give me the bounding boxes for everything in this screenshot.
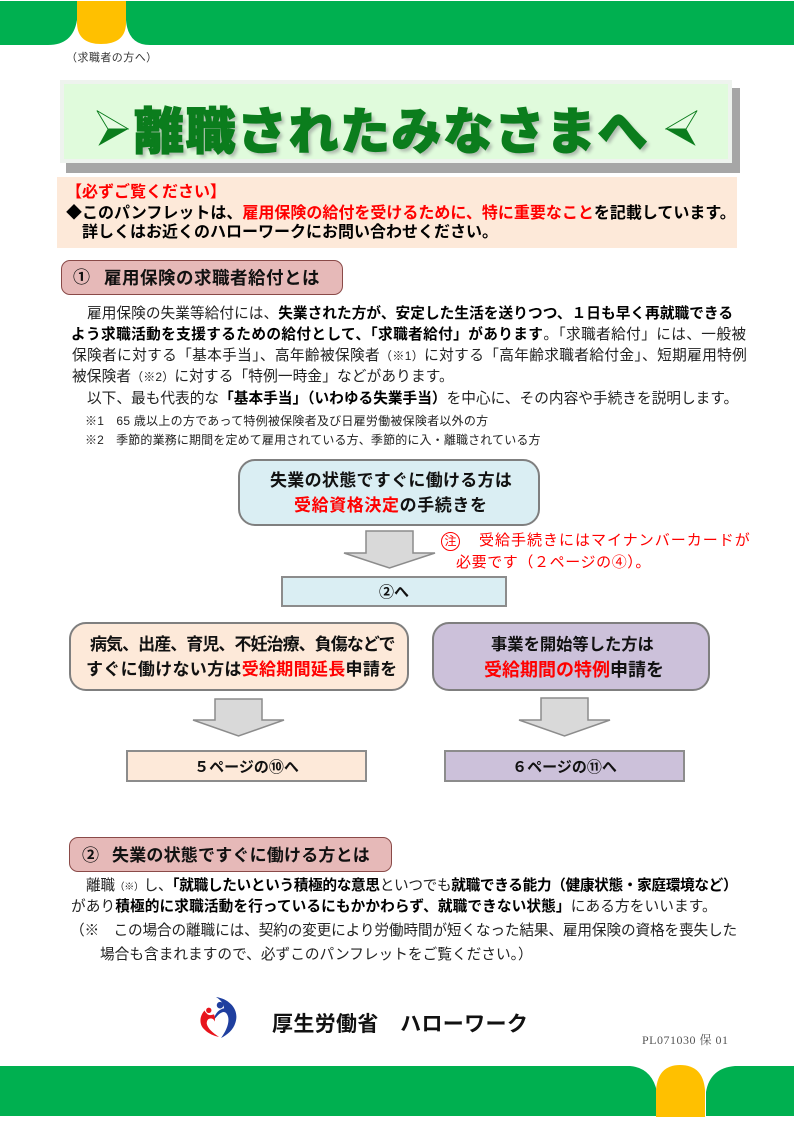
document code: PL071030 保 01: [642, 1033, 729, 1047]
box text line 2: 受給期間の特例申請を: [484, 660, 664, 680]
line 5: 以下、最も代表的な「基本手当」（いわゆる失業手当）を中心に、その内容や手続きを説明します。: [87, 391, 738, 407]
section 2 heading: 失業の状態ですぐに働ける方とは: [112, 846, 370, 865]
line 1: 離職（※）し、「就職したいという積極的な意思といつでも就職できる能力（健康状態・家庭環境など）: [86, 878, 737, 894]
notice heading: 【必ずご覧ください】: [66, 184, 226, 201]
right arrowhead: [665, 110, 698, 146]
box: can work immediately: [238, 459, 540, 526]
box text line 1: 事業を開始等した方は: [491, 636, 654, 654]
line 2: があり積極的に求職活動を行っているにもかかわらず、就職できない状態」にある方をいいます。: [71, 899, 717, 915]
box: to section 2: ②へ: [379, 584, 409, 601]
note mark: [441, 532, 460, 551]
box text line 2: すぐに働けない方は受給期間延長申請を: [86, 660, 397, 679]
arrow 3: [518, 697, 610, 737]
line 4: 場合も含まれますので、必ずこのパンフレットをご覧ください。）: [100, 947, 533, 963]
box text line 2: 受給資格決定の手続きを: [294, 496, 488, 515]
box: to section 2: [281, 576, 507, 607]
section 1 heading: [61, 260, 343, 295]
section 2 body: [70, 877, 737, 963]
banner shadow: [66, 88, 740, 173]
bottom green band with yellow tab: [0, 1065, 794, 1117]
top green band with yellow tab: [0, 1, 794, 45]
line 2: よう求職活動を支援するための給付として、「求職者給付」があります。「求職者給付」には、一般被: [71, 327, 746, 343]
banner panel: [60, 80, 732, 163]
box: to page 6: [444, 750, 685, 782]
box: cannot work immediately: [69, 622, 409, 691]
box text line 1: 病気、出産、育児、不妊治療、負傷などで: [90, 635, 395, 654]
audience label: （求職者の方へ）: [66, 52, 158, 64]
notice line 1: ◆このパンフレットは、雇用保険の給付を受けるために、特に重要なことを記載しています。: [66, 205, 736, 222]
box text line 1: 失業の状態ですぐに働ける方は: [270, 471, 512, 490]
note line 2: 必要です（２ページの④）。: [456, 554, 651, 571]
title text: 離職されたみなさまへ: [134, 104, 649, 160]
note mark: 注: [444, 534, 456, 548]
line 3: 保険者に対する「基本手当」、高年齢被保険者（※1）に対する「高年齢求職者給付金」、短期雇用特例: [72, 348, 747, 364]
notice line 2: 詳しくはお近くのハローワークにお問い合わせください。: [82, 224, 498, 241]
section 2 heading: [69, 837, 392, 872]
box: to page 5: [126, 750, 367, 782]
line 3: （※ この場合の離職には、契約の変更により労働時間が短くなった結果、雇用保険の資格を喪失した: [70, 923, 737, 939]
box: to page 6: ６ページの⑪へ: [512, 759, 617, 776]
box: to page 5: ５ページの⑩へ: [194, 759, 299, 776]
section 1 body: [71, 305, 747, 447]
left arrowhead: [96, 110, 129, 146]
line 1: 雇用保険の失業等給付には、失業された方が、安定した生活を送りつつ、１日も早く再就職できる: [87, 306, 733, 322]
note 1: ※1 65 歳以上の方であって特例被保険者及び日雇労働被保険者以外の方: [85, 414, 488, 428]
note 2: ※2 季節的業務に期間を定めて雇用されている方、季節的に入・離職されている方: [85, 433, 541, 447]
box: started a business: [432, 622, 710, 691]
section 1 heading: 雇用保険の求職者給付とは: [104, 268, 320, 288]
section 2 heading: ②: [82, 846, 99, 865]
title banner: [60, 80, 740, 173]
line 4: 被保険者（※2）に対する「特例一時金」などがあります。: [72, 369, 454, 385]
notice panel: [57, 177, 737, 248]
note line 1: 受給手続きにはマイナンバーカードが: [479, 532, 751, 549]
red note: [441, 532, 751, 571]
ministry name: 厚生労働省 ハローワーク: [272, 1013, 528, 1036]
section 1 heading: ①: [73, 268, 90, 287]
arrow 1: [344, 530, 436, 569]
icon: ministry logo: [200, 997, 236, 1038]
arrow 2: [192, 698, 284, 737]
